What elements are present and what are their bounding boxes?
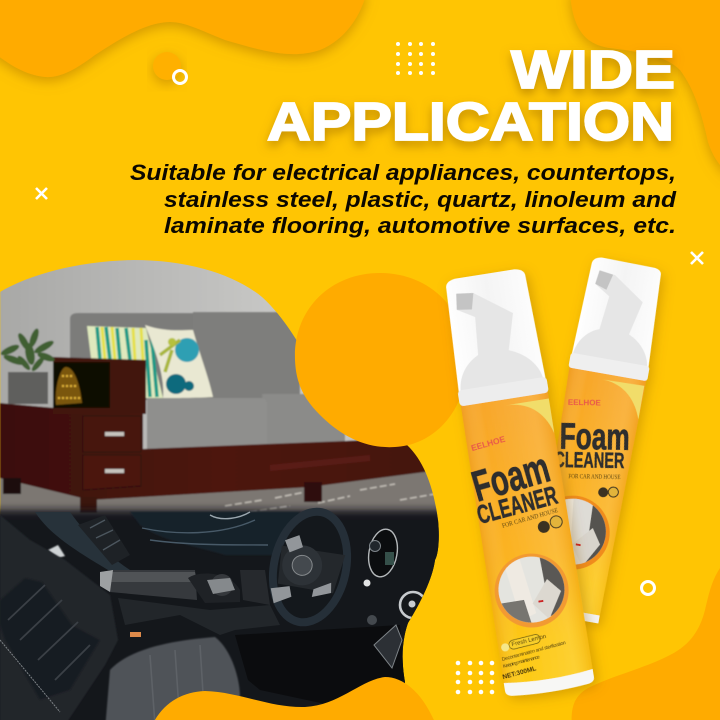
sofa scene: [0, 255, 445, 520]
title: WIDE: [511, 40, 675, 100]
blob: top left orange: [0, 0, 367, 77]
title: APPLICATION: [267, 92, 674, 152]
description text: [130, 160, 677, 238]
round photo: [489, 548, 574, 633]
car interior scene: [0, 505, 445, 720]
seat cushions: [262, 394, 345, 444]
body: [526, 365, 647, 624]
instrument cluster: [368, 528, 398, 578]
collar: [568, 353, 650, 381]
gold statue: [56, 367, 82, 405]
swoosh: [505, 399, 554, 440]
pump: [572, 268, 663, 370]
body: [459, 388, 594, 689]
plant pot: [8, 372, 48, 404]
passenger seat back: [35, 512, 130, 570]
drawers: [83, 416, 141, 452]
product text: [557, 399, 629, 498]
orange buckle: [130, 632, 141, 637]
cap: [441, 267, 546, 395]
collar: [457, 377, 549, 407]
product: front bottle: [438, 267, 595, 699]
icon: cross right: [691, 252, 703, 264]
carpet: [235, 625, 404, 705]
plant: [0, 327, 56, 373]
side shelf: [53, 357, 146, 414]
wood base: [0, 403, 440, 500]
claims: Decontamination and sterilization: [501, 640, 567, 663]
small orange circle: [153, 52, 181, 80]
blob: bottom right orange: [572, 555, 720, 720]
round photo: [530, 490, 616, 575]
driver seat: [0, 515, 118, 720]
centre console: [110, 570, 197, 600]
product name: Foam: [559, 416, 630, 458]
gear controls: [188, 574, 240, 603]
icons: [537, 520, 551, 534]
product: front bottle: Keeping maintenance: [502, 654, 541, 670]
description text: laminate flooring, automotive surfaces, etc.: [164, 213, 676, 238]
floral pillow: [145, 325, 213, 398]
icon: cross left: [36, 188, 47, 199]
title: [267, 40, 675, 152]
floor: [0, 470, 445, 520]
dots: bottom: [456, 661, 494, 694]
scent label: [508, 634, 541, 650]
product: front bottle: NET:300ML: [502, 665, 537, 681]
air vent: [400, 592, 426, 618]
sofa back: [70, 313, 194, 400]
steering wheel: [269, 508, 351, 626]
swoosh: [596, 378, 644, 419]
blob: bottom orange: [150, 677, 438, 720]
icons: [598, 487, 608, 498]
feet: [3, 478, 21, 494]
white ring: [174, 70, 186, 84]
blob: orange circle: [295, 273, 467, 447]
product text: CLEANER: [554, 447, 625, 473]
white ring right: [642, 582, 654, 594]
brand: EELHOE: [568, 398, 601, 407]
dots: top: [396, 42, 435, 75]
product: front bottle: Fresh Lemon: [511, 634, 547, 648]
controls: [364, 580, 370, 586]
description text: stainless steel, plastic, quartz, linoleum and: [164, 187, 677, 212]
product: front bottle: FOR CAR AND HOUSE: [501, 507, 559, 530]
passenger seat cushion: [105, 637, 240, 720]
pump: [445, 282, 544, 394]
photo blob: sofa and car interior: [0, 255, 445, 720]
product: front bottle: CLEANER: [474, 480, 561, 530]
cap: [571, 255, 666, 370]
window highlight: [48, 545, 65, 558]
base ring: [504, 669, 595, 699]
striped pillow: [87, 326, 163, 398]
product: rear bottle: [556, 257, 667, 630]
blob: top right orange: [570, 0, 720, 175]
brand: EELHOE: [470, 434, 507, 453]
door panel: [130, 512, 300, 555]
product text: FOR CAR AND HOUSE: [568, 473, 621, 481]
product name: Foam: [467, 444, 555, 511]
description text: Suitable for electrical appliances, countertops,: [130, 160, 676, 185]
